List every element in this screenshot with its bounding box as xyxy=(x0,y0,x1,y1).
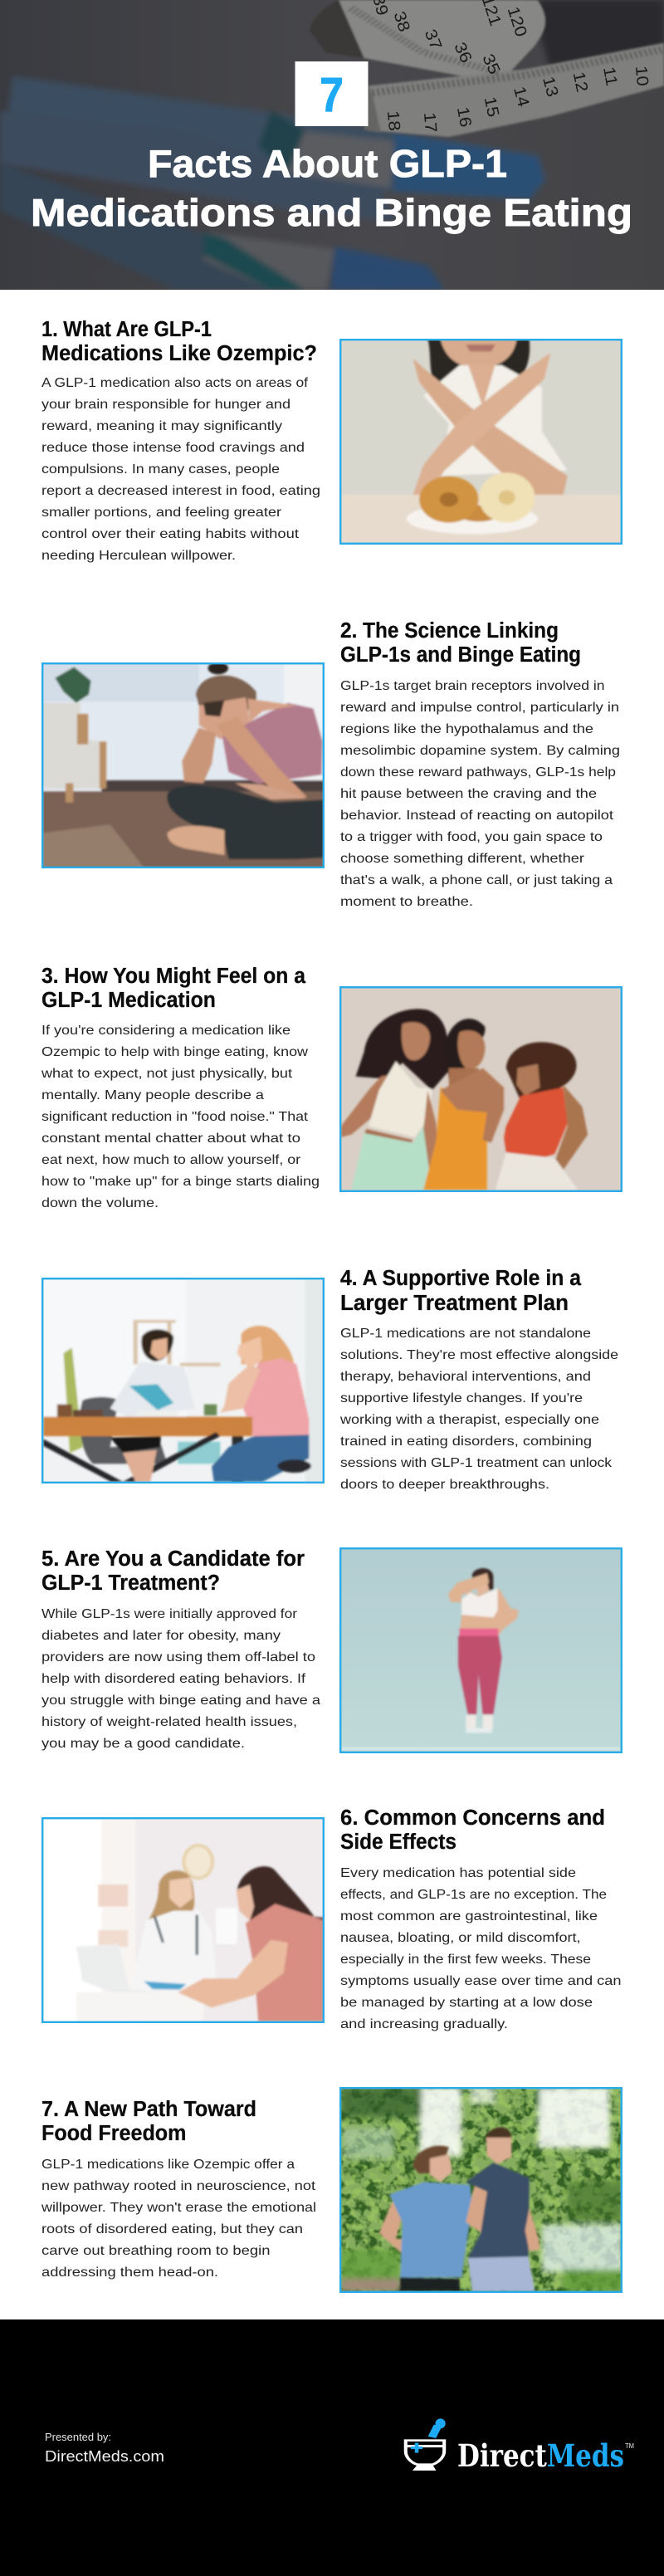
photo: three laughing women xyxy=(339,986,622,1192)
photo: worried woman standing on scale xyxy=(339,1547,622,1753)
text block 1 xyxy=(42,376,320,563)
text block 3: If you're considering a medication like xyxy=(42,1024,290,1038)
text block 4: supportive lifestyle changes. If you're xyxy=(340,1391,583,1405)
panel: fact 5 xyxy=(42,1547,622,1753)
text block 7: GLP-1 medications like Ozempic offer a xyxy=(42,2158,295,2172)
text block 5: providers are now using them off-label to xyxy=(42,1650,315,1664)
tape measure numbers: 35 xyxy=(479,51,504,77)
text block 2: reward and impulse control, particularly in xyxy=(340,701,619,715)
text block 4: trained in eating disorders, combining xyxy=(340,1435,592,1449)
text block 2: that's a walk, a phone call, or just taking a xyxy=(340,873,613,887)
number badge: 7 xyxy=(320,68,344,122)
photo: doctor consulting patient at desk xyxy=(42,1278,325,1484)
text block 1: A GLP-1 medication also acts on areas of xyxy=(42,376,309,390)
heading 1: 1. What Are GLP-1 xyxy=(42,318,212,341)
text block 1: needing Herculean willpower. xyxy=(42,549,236,563)
text block 1: report a decreased interest in food, eating xyxy=(42,484,320,498)
heading 2: 2. The Science Linking xyxy=(340,619,559,643)
text block 2: GLP-1s target brain receptors involved in xyxy=(340,679,604,693)
text block 5: help with disordered eating behaviors. If xyxy=(42,1672,306,1686)
tape measure numbers: 13 xyxy=(539,75,562,99)
photo: couple jogging outdoors xyxy=(339,2087,622,2293)
header background photo: pens and tape measure xyxy=(0,0,664,290)
presenter credit: DirectMeds.com xyxy=(45,2448,164,2465)
heading 3: 3. How You Might Feel on a xyxy=(42,965,306,988)
text block 6 xyxy=(340,1866,621,2031)
tape measure numbers: 16 xyxy=(453,105,475,129)
text block 2: hit pause between the craving and the xyxy=(340,787,597,801)
text block 1: reduce those intense food cravings and xyxy=(42,441,305,455)
text block 4: doors to deeper breakthroughs. xyxy=(340,1478,549,1492)
heading 5 xyxy=(42,1547,305,1595)
text block 1: your brain responsible for hunger and xyxy=(42,398,290,412)
text block 7: addressing them head-on. xyxy=(42,2266,218,2280)
tape measure numbers: 11 xyxy=(599,66,621,87)
text block 5: you may be a good candidate. xyxy=(42,1737,245,1751)
tape measure numbers: 15 xyxy=(481,95,502,119)
text block 2: mesolimbic dopamine system. By calming xyxy=(340,744,620,758)
tape measure numbers: 36 xyxy=(451,40,476,66)
text block 6: Every medication has potential side xyxy=(340,1866,576,1880)
text block 5: diabetes and later for obesity, many xyxy=(42,1629,281,1643)
text block 2: moment to breathe. xyxy=(340,895,473,909)
text block 3: how to "make up" for a binge starts dialing xyxy=(42,1175,320,1189)
text block 3: mentally. Many people describe a xyxy=(42,1088,264,1102)
number badge xyxy=(295,61,369,126)
text block 2: regions like the hypothalamus and the xyxy=(340,722,593,736)
text block 4 xyxy=(339,1327,618,1492)
text block 3: significant reduction in "food noise." That xyxy=(42,1110,309,1124)
heading 7 xyxy=(42,2098,256,2145)
text block 2: to a trigger with food, you gain space to xyxy=(340,830,603,844)
text block 7 xyxy=(41,2158,316,2280)
title: Medications and Binge Eating xyxy=(31,191,632,234)
tape measure numbers: 38 xyxy=(390,9,413,34)
text block 4: sessions with GLP-1 treatment can unlock xyxy=(340,1456,613,1470)
text block 3 xyxy=(41,1024,320,1210)
tape measure numbers: 37 xyxy=(421,27,445,52)
text block 4: solutions. They're most effective alongside xyxy=(340,1348,618,1362)
heading 2 xyxy=(340,619,581,667)
heading 7: 7. A New Path Toward xyxy=(42,2098,256,2121)
text block 7: willpower. They won't erase the emotional xyxy=(41,2201,316,2215)
heading 4: 4. A Supportive Role in a xyxy=(340,1267,582,1290)
text block 2: behavior. Instead of reacting on autopilot xyxy=(340,809,614,823)
text block 3: eat next, how much to allow yourself, or xyxy=(42,1153,301,1167)
text block 4: working with a therapist, especially one xyxy=(339,1413,599,1427)
panel: fact 2 xyxy=(42,619,620,909)
text block 2: down these reward pathways, GLP-1s help xyxy=(340,765,616,780)
text block 4: GLP-1 medications are not standalone xyxy=(340,1327,591,1341)
heading 3 xyxy=(42,965,306,1012)
heading 7: Food Freedom xyxy=(42,2122,186,2145)
title xyxy=(31,142,632,234)
heading 3: GLP-1 Medication xyxy=(42,989,216,1012)
text block 6: and increasing gradually. xyxy=(340,2017,508,2031)
heading 6 xyxy=(340,1806,605,1854)
panel: fact 1 xyxy=(42,318,622,563)
heading 4: Larger Treatment Plan xyxy=(340,1292,569,1315)
heading 1: Medications Like Ozempic? xyxy=(42,342,317,365)
text block 5: While GLP-1s were initially approved for xyxy=(42,1607,298,1621)
tape measure numbers: 14 xyxy=(510,85,533,109)
heading 4 xyxy=(340,1267,582,1315)
heading 6: Side Effects xyxy=(340,1831,456,1854)
icon: mortar and pestle xyxy=(406,2418,446,2471)
presenter credit xyxy=(45,2432,164,2465)
photo: woman with head in hands xyxy=(42,662,325,869)
photo: woman refusing donuts xyxy=(339,339,622,545)
text block 5: you struggle with binge eating and have a xyxy=(42,1694,320,1708)
text block 6: be managed by starting at a low dose xyxy=(340,1996,593,2010)
tape measure numbers: 17 xyxy=(420,111,440,134)
panel: fact 3 xyxy=(41,965,622,1210)
text block 6: nausea, bloating, or mild discomfort, xyxy=(340,1931,581,1945)
tape measure numbers xyxy=(369,0,652,134)
text block 3: Ozempic to help with binge eating, know xyxy=(42,1045,308,1059)
heading 2: GLP-1s and Binge Eating xyxy=(340,643,581,667)
text block 1: compulsions. In many cases, people xyxy=(42,462,280,477)
text block 7: roots of disordered eating, but they can xyxy=(42,2222,303,2236)
tape measure numbers: 18 xyxy=(383,110,403,132)
text block 6: effects, and GLP-1s are no exception. The xyxy=(340,1888,607,1902)
text block 7: carve out breathing room to begin xyxy=(42,2244,271,2258)
text block 6: especially in the first few weeks. These xyxy=(340,1953,591,1967)
wordmark: DirectMeds xyxy=(457,2437,624,2474)
photo: doctor and patient in bright office xyxy=(42,1817,325,2023)
text block 1: smaller portions, and feeling greater xyxy=(42,506,282,520)
title: Facts About GLP-1 xyxy=(148,142,507,185)
panel: fact 6 xyxy=(42,1806,621,2031)
trademark: TM xyxy=(625,2442,634,2450)
tape measure numbers: 10 xyxy=(632,65,652,87)
text block 2 xyxy=(340,679,620,909)
heading 5: 5. Are You a Candidate for xyxy=(42,1547,305,1571)
text block 5: history of weight-related health issues, xyxy=(42,1715,297,1729)
text block 5 xyxy=(42,1607,320,1751)
text block 6: most common are gastrointestinal, like xyxy=(340,1909,598,1923)
text block 3: what to expect, not just physically, but xyxy=(41,1067,293,1081)
footer xyxy=(0,2319,664,2576)
panel: fact 7 xyxy=(41,2087,622,2293)
text block 1: control over their eating habits without xyxy=(42,527,300,541)
panel: fact 4 xyxy=(42,1267,618,1492)
heading 5: GLP-1 Treatment? xyxy=(42,1572,220,1595)
heading 6: 6. Common Concerns and xyxy=(340,1806,605,1830)
tape measure numbers: 12 xyxy=(569,70,591,94)
text block 6: symptoms usually ease over time and can xyxy=(340,1974,621,1988)
heading 1 xyxy=(42,318,317,365)
text block 7: new pathway rooted in neuroscience, not xyxy=(42,2179,316,2193)
text block 2: choose something different, whether xyxy=(340,852,585,866)
presenter credit: Presented by: xyxy=(45,2432,111,2443)
text block 1: reward, meaning it may significantly xyxy=(42,419,282,433)
text block 3: down the volume. xyxy=(42,1196,159,1210)
header banner xyxy=(0,0,664,290)
logo: DirectMeds mortar and pestle xyxy=(406,2418,634,2474)
tape measure numbers: 120 xyxy=(504,4,530,39)
text block 4: therapy, behavioral interventions, and xyxy=(340,1370,591,1384)
text block 3: constant mental chatter about what to xyxy=(42,1132,300,1146)
